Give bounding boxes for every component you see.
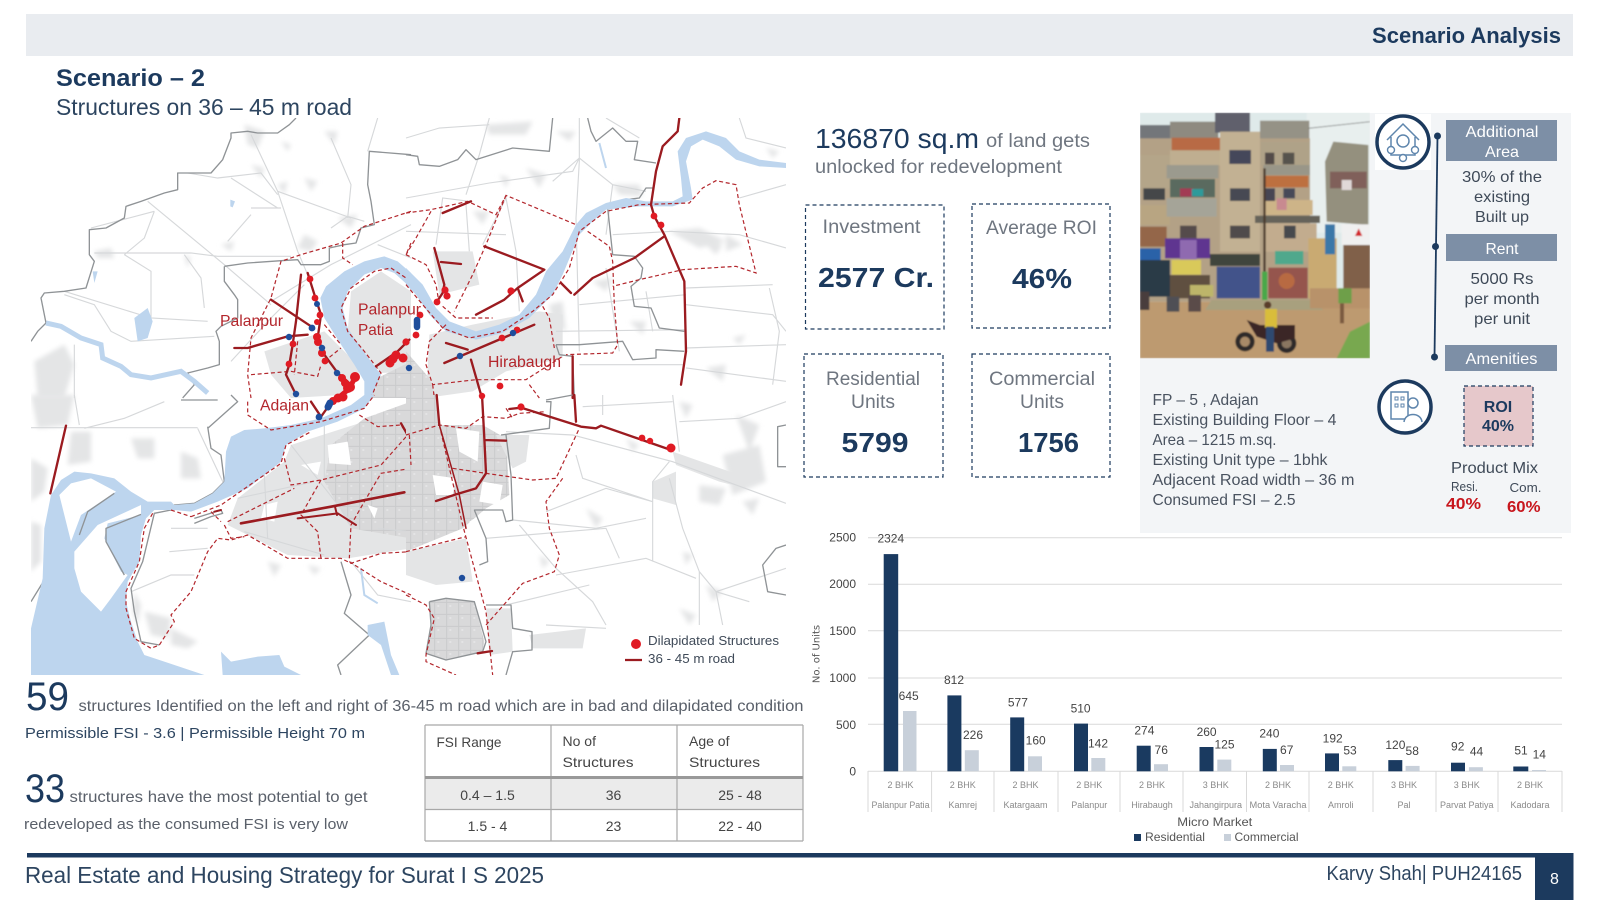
map sheet: south-east (406, 395, 786, 675)
rent block: per unit (1474, 311, 1531, 328)
site details (1152, 392, 1354, 509)
card: investment: Investment (822, 217, 921, 238)
map legend (625, 636, 778, 663)
rent block (1446, 234, 1557, 328)
map legend: Dilapidated Structures (648, 633, 780, 648)
permissible FSI note: Permissible FSI - 3.6 | Permissible Height 70 m (25, 725, 365, 742)
product mix: Resi. (1451, 479, 1478, 494)
additional area block: Area (1485, 144, 1519, 161)
rent block: Rent (1486, 241, 1519, 258)
card: residential units (804, 354, 943, 477)
site details: Consumed FSI – 2.5 (1152, 492, 1296, 509)
data labels: 274 (1134, 724, 1155, 738)
scenario heading: Structures on 36 – 45 m road (56, 94, 352, 120)
data labels: 226 (963, 728, 983, 742)
category labels: Pal (1397, 800, 1411, 810)
category labels: 2 BHK (1517, 780, 1543, 790)
data labels: 120 (1385, 738, 1406, 752)
map sheet: south-west (31, 395, 411, 675)
category labels: 3 BHK (1203, 780, 1229, 790)
amenities block (1445, 345, 1557, 371)
panel: case study (1140, 113, 1571, 533)
header bar (26, 14, 1573, 56)
data labels: 240 (1259, 726, 1280, 740)
data labels: 92 (1451, 740, 1465, 754)
site details: Existing Unit type – 1bhk (1152, 452, 1328, 469)
ROI badge: 40% (1482, 418, 1514, 435)
card: investment: 2577 Cr. (818, 262, 934, 293)
table text: 36 (606, 787, 621, 803)
category labels: 2 BHK (1139, 780, 1165, 790)
chart legend: Residential (1145, 830, 1205, 844)
table text: Structures (562, 754, 634, 770)
data labels: 645 (899, 689, 919, 703)
icon: house with people (1375, 114, 1431, 170)
page number (1535, 857, 1574, 900)
category labels: Hirabaugh (1131, 800, 1173, 810)
data labels: 14 (1533, 747, 1546, 761)
data labels: 53 (1343, 744, 1357, 758)
product mix: Product Mix (1451, 460, 1538, 477)
data labels: 192 (1323, 731, 1343, 745)
category labels: Kamrej (949, 800, 977, 810)
category labels: 2 BHK (887, 780, 914, 790)
data labels: 2324 (877, 532, 904, 546)
table text: 23 (606, 818, 621, 834)
y axis labels (829, 530, 856, 778)
footer: Real Estate and Housing Strategy for Surat I S 2025 (25, 862, 544, 888)
card: average ROI: 46% (1012, 263, 1072, 294)
additional area block: Additional (1466, 124, 1538, 141)
data labels: 67 (1280, 743, 1294, 757)
card: average ROI (972, 204, 1110, 328)
statistic: 33 structures: structures have the most potential to get (70, 789, 368, 806)
statistic: 59 structures: 59 (26, 675, 69, 719)
product mix (1446, 460, 1542, 516)
site details: FP – 5 , Adajan (1152, 392, 1258, 409)
ROI badge: ROI (1484, 399, 1512, 416)
data labels (877, 532, 1546, 761)
rent block: per month (1464, 291, 1540, 308)
map place labels: Palanpur (358, 302, 422, 318)
category labels: Palanpur Patia (872, 800, 930, 810)
data labels: 51 (1514, 744, 1528, 758)
footer (25, 853, 1574, 900)
commercial bars (903, 711, 1546, 771)
map place labels: Adajan (260, 398, 309, 414)
category labels: Katargaam (1003, 800, 1048, 810)
map sheet: north-west (31, 118, 411, 398)
land unlocked callout (815, 123, 1090, 178)
map place labels: Palanpur (220, 313, 284, 330)
category labels: Jahangirpura (1190, 800, 1242, 810)
additional area block: existing (1474, 189, 1530, 206)
statistic: 59 structures (26, 675, 803, 719)
data labels: 76 (1155, 743, 1168, 757)
statistic: 33 structures: 33 (25, 767, 65, 811)
chart legend (1134, 830, 1298, 844)
dilapidated structure markers (286, 213, 676, 581)
header title: Scenario Analysis (1372, 23, 1561, 48)
table text: 25 - 48 (718, 787, 762, 803)
product mix: Com. (1510, 480, 1542, 495)
page number: 8 (1550, 871, 1559, 888)
photo: dilapidated building (1140, 113, 1370, 358)
category labels: 2 BHK (1328, 780, 1354, 790)
bar chart: units by micro market (812, 530, 1562, 844)
map sheet: north-east (406, 118, 786, 398)
additional area block: Built up (1475, 209, 1529, 226)
chart legend: Commercial (1234, 830, 1298, 844)
amenities block: Amenities (1466, 351, 1538, 368)
category labels: Amroli (1328, 800, 1354, 810)
y axis labels: 0 (849, 764, 856, 778)
y axis labels: 500 (836, 718, 856, 732)
card: commercial units: Commercial (989, 369, 1095, 390)
card: investment (806, 205, 944, 329)
map place labels (220, 302, 561, 414)
data labels: 125 (1214, 738, 1235, 752)
card: average ROI: Average ROI (986, 218, 1097, 239)
statistic: 33 structures (24, 767, 368, 833)
statistic: 59 structures: structures Identified on the left and right of 36-45 m road which are in bad and dilapidated condition (78, 698, 803, 715)
table text: Age of (689, 733, 730, 749)
map place labels: Hirabaugh (488, 354, 561, 371)
land unlocked callout: 136870 sq.m (815, 123, 979, 154)
table text: Structures (689, 754, 760, 770)
map legend: 36 - 45 m road (648, 651, 735, 666)
timeline connector (1431, 132, 1441, 360)
table text: 1.5 - 4 (468, 818, 508, 834)
site details: Adjacent Road width – 36 m (1152, 472, 1354, 489)
ROI badge (1464, 386, 1533, 446)
y axis labels: 1000 (829, 671, 856, 685)
category labels (872, 780, 1550, 810)
data labels: 142 (1088, 736, 1108, 750)
footer: Karvy Shah| PUH24165 (1326, 863, 1522, 885)
data labels: 812 (944, 673, 964, 687)
product mix: 60% (1507, 499, 1540, 516)
statistic: 33 structures: redeveloped as the consumed FSI is very low (24, 816, 348, 833)
residential bars (884, 554, 1528, 771)
category labels: 2 BHK (950, 780, 976, 790)
table text: FSI Range (436, 734, 502, 750)
additional area block: 30% of the (1462, 169, 1542, 186)
table text (436, 733, 762, 834)
FSI table (425, 725, 803, 841)
category labels: 2 BHK (1012, 780, 1039, 790)
table text: No of (562, 733, 596, 749)
map of Surat (31, 118, 786, 675)
category labels: 2 BHK (1265, 780, 1291, 790)
card: residential units: Units (851, 392, 895, 413)
category labels: Palanpur (1071, 800, 1107, 810)
y axis labels: 2000 (829, 577, 856, 591)
data labels: 577 (1008, 696, 1028, 710)
site details: Area – 1215 m.sq. (1152, 432, 1276, 449)
category labels: Mota Varacha (1250, 800, 1306, 810)
y axis labels: 2500 (829, 530, 856, 544)
data labels: 44 (1470, 745, 1483, 759)
category labels: 3 BHK (1454, 780, 1480, 790)
table text: 22 - 40 (718, 818, 762, 834)
land unlocked callout: of land gets (986, 131, 1090, 152)
icon: building and engineer (1379, 381, 1431, 433)
category labels: 2 BHK (1076, 780, 1102, 790)
category labels: 3 BHK (1391, 780, 1417, 790)
additional area block (1446, 120, 1557, 226)
card: commercial units: 1756 (1018, 427, 1079, 458)
table text: 0.4 – 1.5 (460, 787, 515, 803)
land unlocked callout: unlocked for redevelopment (815, 157, 1063, 178)
data labels: 58 (1406, 744, 1419, 758)
site details: Existing Building Floor – 4 (1152, 412, 1337, 429)
map place labels: Patia (358, 322, 393, 339)
category labels: Parvat Patiya (1440, 800, 1494, 810)
scenario heading (56, 65, 352, 120)
card: commercial units (972, 354, 1110, 477)
card: residential units: 5799 (842, 427, 908, 458)
data labels: 260 (1197, 725, 1217, 739)
data labels: 160 (1026, 734, 1046, 748)
gridlines (868, 538, 1562, 724)
card: residential units: Residential (826, 369, 920, 390)
product mix: 40% (1446, 496, 1481, 513)
y axis title: No. of Units (812, 625, 822, 683)
data labels: 510 (1071, 702, 1091, 716)
x axis title: Micro Market (1177, 815, 1253, 829)
y axis labels: 1500 (829, 624, 856, 638)
rent block: 5000 Rs (1470, 271, 1534, 288)
card: commercial units: Units (1020, 392, 1064, 413)
category labels: Kadodara (1510, 800, 1550, 810)
scenario heading: Scenario – 2 (56, 65, 205, 92)
